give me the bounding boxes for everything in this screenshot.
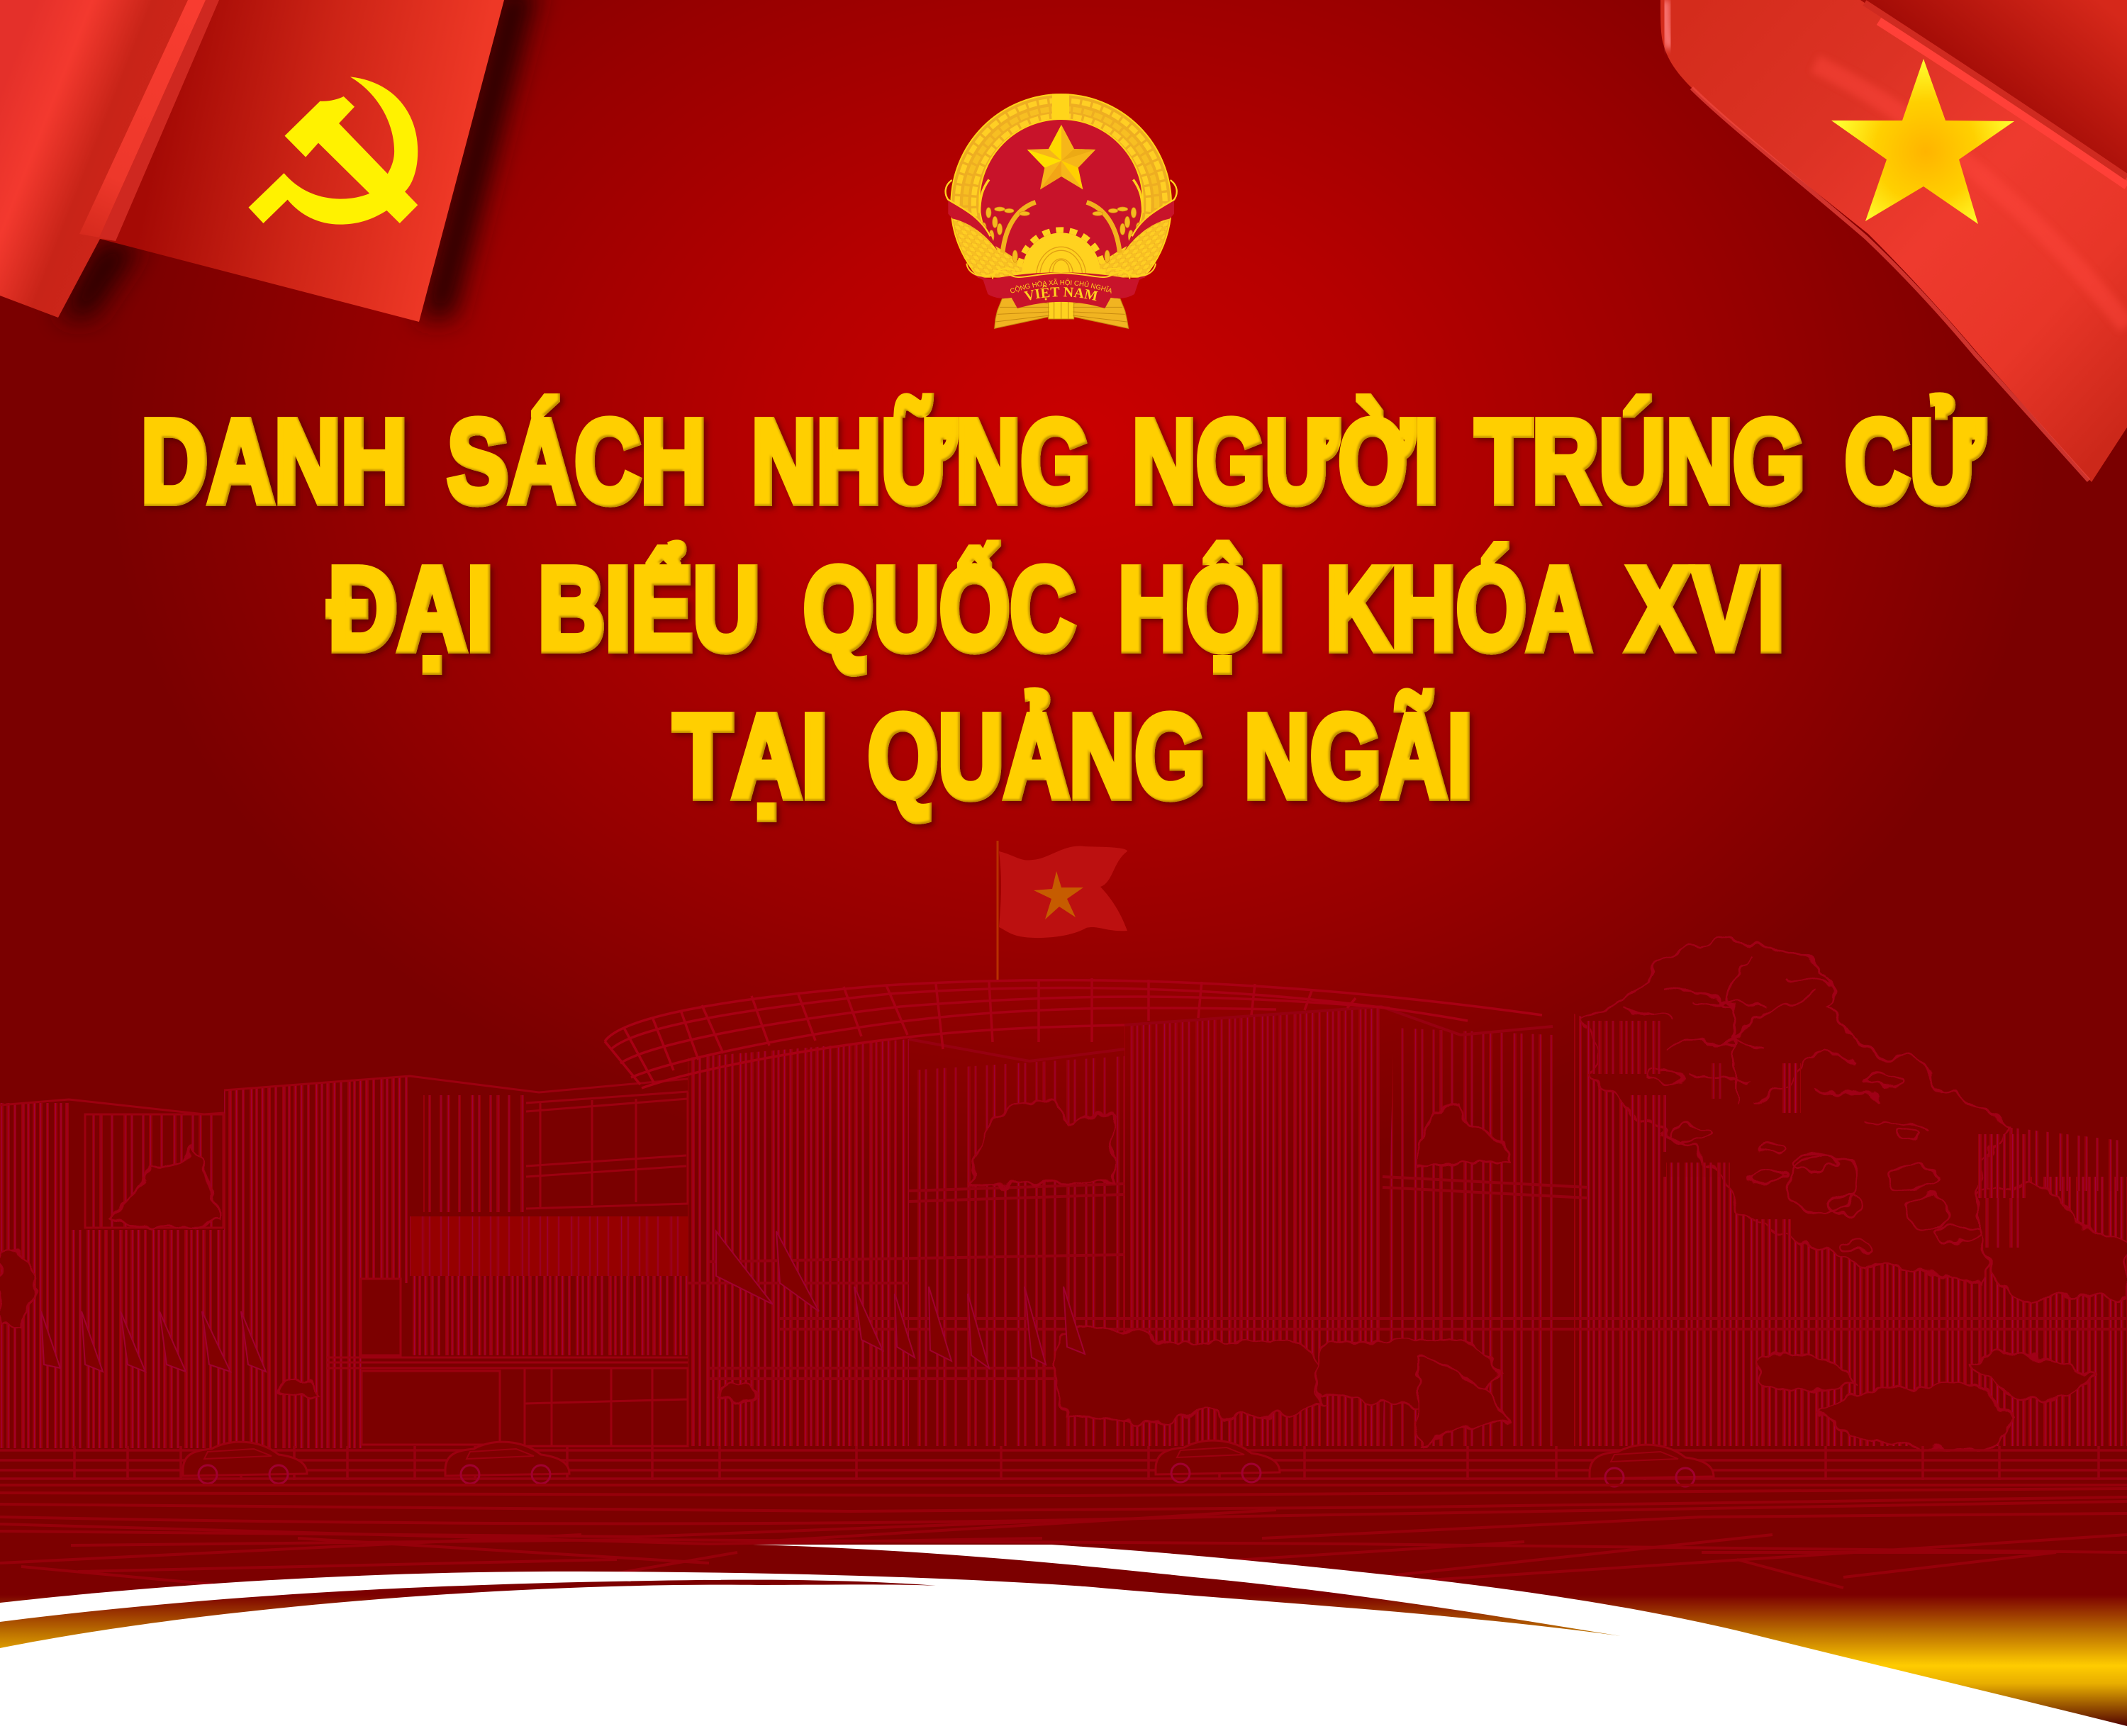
car 3 bbox=[1156, 1440, 1280, 1482]
title line 3: QUẢNG bbox=[868, 690, 1205, 822]
title line 2: XVI bbox=[1627, 543, 1785, 675]
wreath bbox=[950, 94, 1172, 278]
band sheen bbox=[1815, 64, 2127, 326]
emblem text lower: VIỆT NAM bbox=[1024, 285, 1098, 301]
parliament building line art bbox=[0, 841, 2127, 1588]
title line 2 bbox=[328, 543, 1785, 675]
title line 1: CỬ bbox=[1845, 396, 1984, 527]
emblem star bbox=[1027, 125, 1095, 189]
lower edge light bbox=[1692, 88, 2089, 481]
tree branches and leaf clusters bbox=[1624, 957, 1980, 1253]
car 4 bbox=[1590, 1445, 1714, 1486]
title line 1: TRÚNG bbox=[1475, 396, 1805, 527]
party flag bbox=[0, 0, 539, 322]
title line 2: HỘI bbox=[1118, 543, 1285, 675]
flag pole bbox=[997, 841, 998, 980]
title line 3: TẠI bbox=[674, 690, 828, 822]
gear bbox=[1020, 230, 1103, 313]
fold dark strip bbox=[99, 0, 219, 241]
flag star bbox=[1034, 871, 1083, 919]
title line 1 bbox=[141, 396, 1984, 527]
sheaf base bbox=[995, 296, 1129, 328]
national emblem bbox=[944, 94, 1178, 329]
centre block stripes bbox=[688, 1007, 2127, 1446]
vietnam flag bbox=[1660, 0, 2127, 482]
flag star bbox=[1831, 59, 2014, 224]
bushes bbox=[1055, 1326, 1326, 1421]
lawn lamps bbox=[280, 1379, 319, 1396]
title line 2: KHÓA bbox=[1326, 543, 1592, 675]
bottom gold band bbox=[0, 1489, 2127, 1736]
banner gold curl bbox=[966, 264, 1156, 279]
title line 1: NHỮNG bbox=[752, 396, 1090, 527]
national flag on the roof bbox=[997, 841, 1127, 980]
wreath top band bbox=[1052, 94, 1069, 119]
car 2 bbox=[445, 1442, 569, 1484]
entrance dark recesses bbox=[361, 1279, 500, 1445]
ribbon curls bbox=[946, 180, 1177, 236]
emblem text upper: CỘNG HÒA XÃ HỘI CHỦ NGHĨA bbox=[1010, 279, 1112, 293]
title line 2: ĐẠI bbox=[328, 543, 493, 675]
flag body bbox=[100, 0, 504, 322]
fold highlight strip bbox=[79, 0, 206, 237]
fold shadow bbox=[58, 239, 142, 319]
title line 2: BIỂU bbox=[538, 543, 760, 675]
red field bbox=[979, 119, 1143, 283]
left sprig bbox=[980, 179, 1036, 262]
fence bbox=[0, 1446, 2127, 1480]
stripes seen through tree bbox=[1585, 1021, 2028, 1276]
side ribbons bbox=[948, 200, 1174, 250]
bottom banner bbox=[966, 264, 1156, 308]
hammer and sickle bbox=[249, 77, 418, 225]
roof grid bbox=[605, 978, 1542, 1088]
left wing outlines bbox=[0, 1076, 688, 1446]
title bbox=[141, 396, 1984, 822]
band shine upper bbox=[1879, 21, 2127, 186]
flag band bbox=[1660, 0, 2127, 482]
upper flag part bbox=[1860, 0, 2127, 177]
flag shadow bbox=[418, 0, 539, 319]
lower wreath sheaves bbox=[953, 218, 1169, 278]
title line 1: SÁCH bbox=[447, 396, 707, 527]
car 1 bbox=[183, 1442, 307, 1484]
white swoosh bbox=[0, 1545, 2127, 1736]
title line 1: DANH bbox=[141, 396, 408, 527]
window trees bbox=[971, 1102, 1113, 1185]
title line 1: NGƯỜI bbox=[1132, 396, 1439, 527]
title line 3 bbox=[674, 690, 1473, 822]
title line 2: QUỐC bbox=[803, 543, 1076, 675]
row of flags bbox=[41, 1231, 1085, 1372]
band dark edge bbox=[1865, 3, 2127, 177]
title line 3: NGÃI bbox=[1244, 690, 1473, 822]
left wing stripes bbox=[0, 1063, 712, 1448]
left fold glare bbox=[1665, 0, 1670, 48]
centre horizontal window bars bbox=[688, 1007, 2127, 1379]
plaza paving lines bbox=[0, 1485, 2127, 1588]
right sprig bbox=[1087, 179, 1143, 262]
big tree right bbox=[1581, 940, 2014, 1287]
fence rails and vehicles bbox=[0, 1440, 2127, 1486]
trees bbox=[0, 940, 2127, 1450]
left fold bbox=[0, 0, 219, 318]
flag cloth bbox=[999, 846, 1127, 938]
rice sprigs bbox=[980, 179, 1143, 262]
